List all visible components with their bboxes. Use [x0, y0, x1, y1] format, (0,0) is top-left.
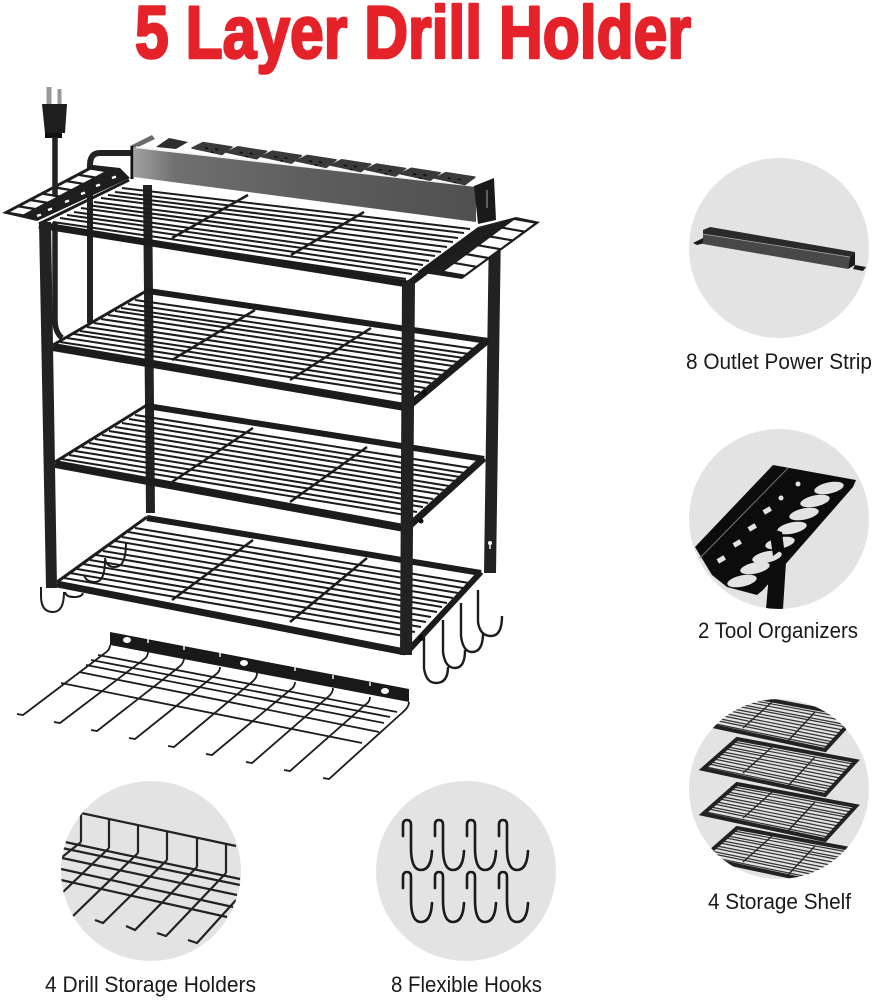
left hooks — [41, 543, 126, 612]
label: 4 Drill Storage Holders — [45, 972, 256, 997]
shelf 3 — [55, 405, 484, 528]
icon: eight hooks — [403, 820, 528, 922]
circle background — [61, 781, 241, 961]
shelf 4 — [57, 517, 481, 652]
left tool organizer — [2, 165, 130, 221]
main product: drill holder rack — [2, 87, 540, 683]
front power cord — [55, 137, 62, 338]
shelf 1 — [39, 180, 478, 285]
circle background — [689, 699, 869, 879]
right tool organizer — [417, 217, 540, 279]
label: 2 Tool Organizers — [698, 618, 858, 643]
panel: 8 outlet power strip — [686, 158, 872, 374]
icon: power plug — [42, 87, 67, 138]
circle background — [689, 429, 869, 609]
rear power cord — [90, 153, 131, 323]
panel: 4 drill storage holders — [45, 781, 256, 997]
panel: 4 storage shelf — [689, 694, 869, 914]
icon: tool organizer — [695, 465, 856, 609]
label: 4 Storage Shelf — [708, 889, 852, 914]
icon: power strip — [693, 227, 866, 271]
label: 8 Flexible Hooks — [391, 972, 542, 997]
panel: 8 flexible hooks — [376, 781, 556, 997]
panel: 2 tool organizers — [689, 429, 869, 643]
circle background — [689, 158, 869, 338]
right hooks — [424, 590, 502, 683]
front posts — [39, 222, 492, 655]
shelf 2 — [53, 290, 488, 407]
drill storage holder detached — [17, 632, 409, 779]
power strip — [130, 135, 496, 224]
icon: drill holder closeup — [61, 813, 240, 943]
back posts — [143, 185, 501, 573]
circle background — [376, 781, 556, 961]
icon: stacked shelves — [703, 694, 856, 884]
